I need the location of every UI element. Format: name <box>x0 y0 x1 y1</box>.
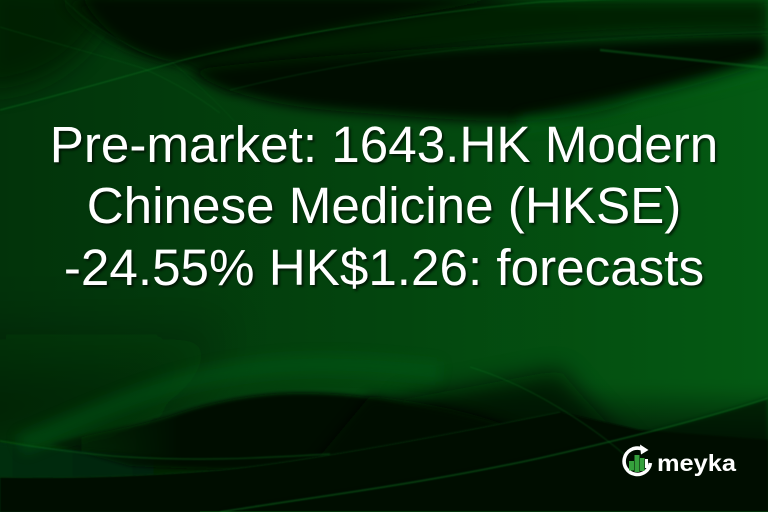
icon: circular arrow with bars <box>624 444 650 474</box>
top region between strands <box>64 0 768 90</box>
left dimming on lower half <box>0 300 240 450</box>
title: Chinese Medicine (HKSE) <box>87 177 681 234</box>
bottom left band <box>0 440 560 512</box>
lower-right fade <box>430 385 768 512</box>
dark hump <box>50 393 580 480</box>
top dark pool <box>80 0 539 62</box>
top-left corner shade <box>0 0 120 90</box>
title: -24.55% HK$1.26: forecasts <box>64 238 704 296</box>
bottom black band <box>0 412 768 512</box>
lower hump wave glow <box>20 364 440 445</box>
title <box>50 116 718 296</box>
wordmark: meyka <box>657 450 736 476</box>
bright band on right <box>520 66 768 124</box>
title: Pre-market: 1643.HK Modern <box>50 116 718 172</box>
logo: meyka <box>622 444 736 476</box>
